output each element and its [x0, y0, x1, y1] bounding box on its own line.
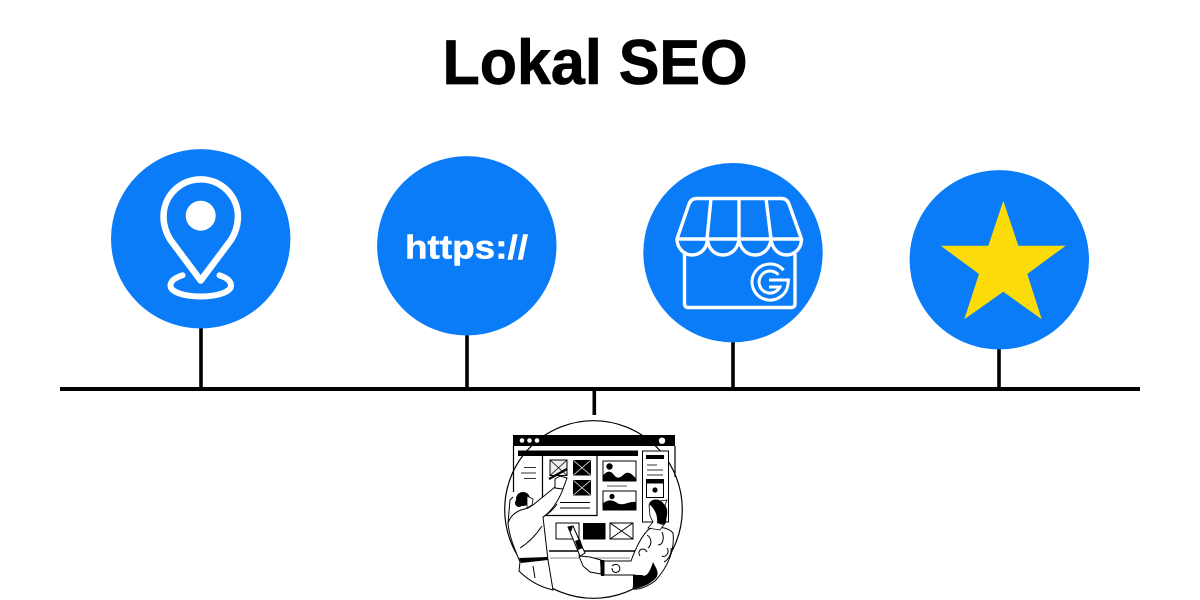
- icon: google business storefront: [643, 163, 823, 342]
- person: man pointing: [508, 469, 567, 590]
- title: Lokal SEO: [442, 28, 748, 98]
- person: woman with pen: [568, 500, 673, 589]
- wireframe row: [549, 523, 637, 558]
- image placeholders: [603, 461, 636, 510]
- timeline axis: [60, 325, 1140, 415]
- wireframe panel: [542, 456, 597, 516]
- icon: https url: [377, 156, 556, 336]
- sidebar panel: [642, 451, 668, 522]
- icon: star rating: [910, 170, 1089, 350]
- illustration: people designing a web page: [505, 421, 682, 598]
- icon: google G: [756, 268, 784, 297]
- icon: https url: https://: [405, 230, 528, 266]
- icon: location pin: [111, 149, 290, 328]
- browser window: [513, 435, 675, 492]
